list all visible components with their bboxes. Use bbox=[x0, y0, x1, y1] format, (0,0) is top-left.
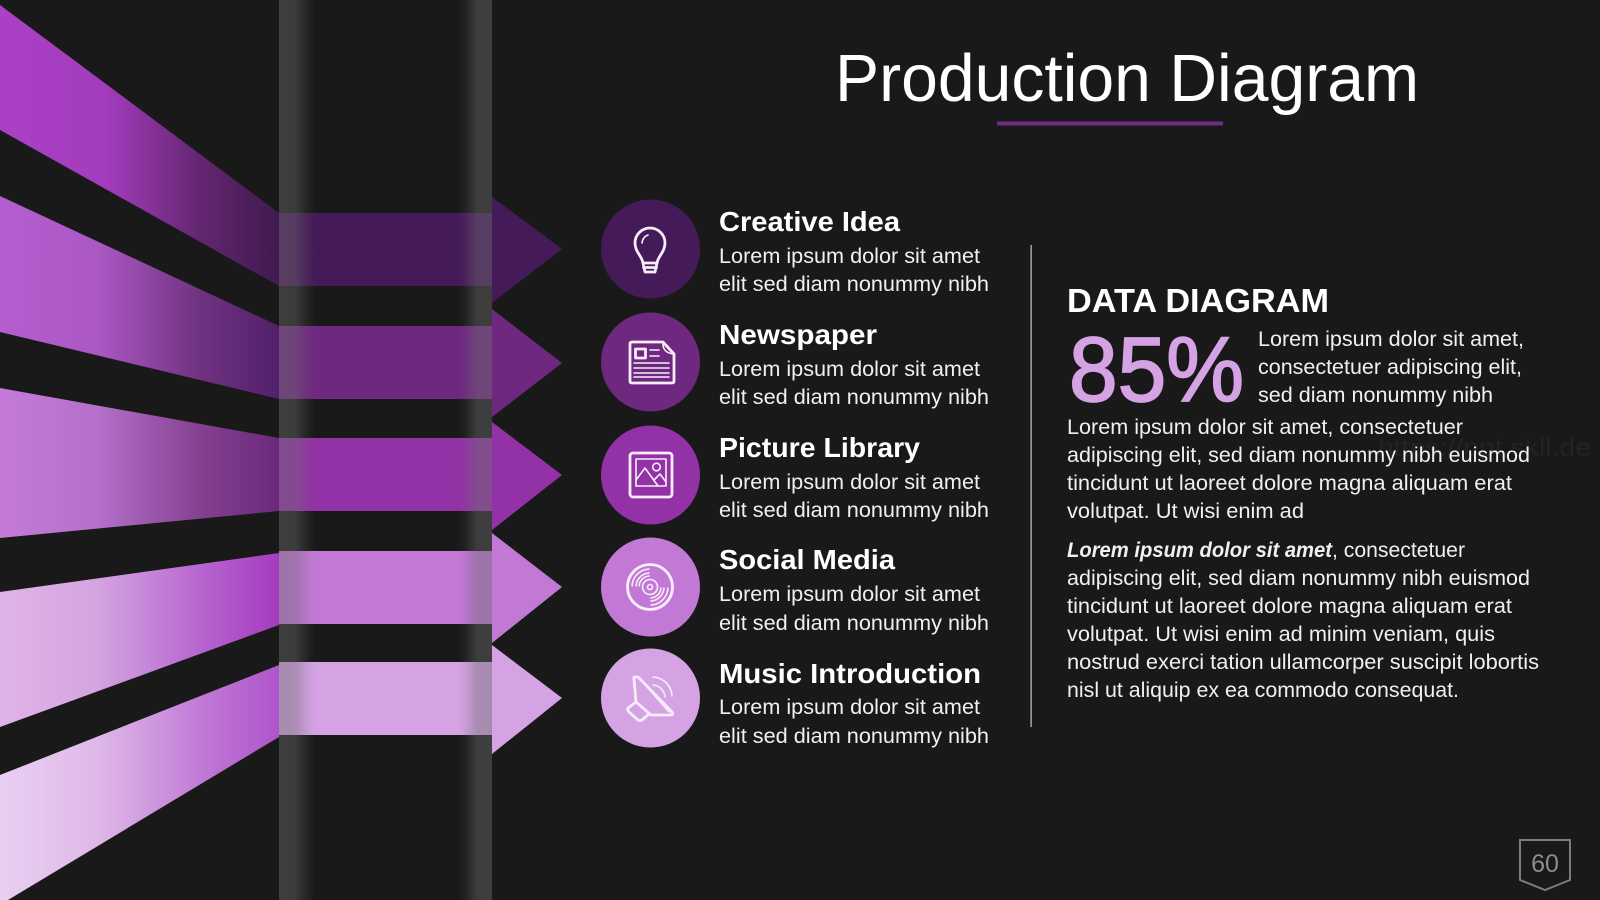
paragraph 1 bbox=[1067, 415, 1530, 523]
funnel band 3 bbox=[0, 388, 279, 538]
paragraph 2 bbox=[1067, 538, 1539, 702]
text: picture library bbox=[719, 432, 989, 522]
paragraph 2: , consectetuer bbox=[1332, 538, 1465, 562]
text beside percentage: consectetuer adipiscing elit, bbox=[1258, 355, 1522, 379]
paragraph 1: adipiscing elit, sed diam nonummy nibh euismod bbox=[1067, 443, 1530, 467]
arrow 4 bbox=[279, 533, 562, 643]
text: music introduction: Music Introduction bbox=[719, 658, 981, 689]
icon: speaker bbox=[628, 677, 673, 720]
data heading: DATA DIAGRAM bbox=[1067, 282, 1329, 319]
circle: music introduction bbox=[601, 648, 700, 748]
title: Production Diagram bbox=[835, 41, 1419, 116]
circle: social media bbox=[601, 538, 700, 636]
arrow 5 bbox=[279, 645, 562, 754]
watermark: https://ppt.skll.de bbox=[1378, 434, 1591, 462]
funnel band 2 bbox=[0, 196, 279, 399]
arrow 3 bbox=[279, 422, 562, 530]
text: social media: Social Media bbox=[719, 544, 895, 575]
circle: picture library bbox=[601, 426, 700, 524]
text: creative idea bbox=[719, 206, 989, 296]
left strip bbox=[279, 0, 315, 900]
icon: music disc bbox=[628, 564, 672, 610]
funnel band 1 bbox=[0, 5, 279, 286]
text beside percentage bbox=[1258, 327, 1524, 407]
arrow 2 bbox=[279, 309, 562, 417]
text: newspaper bbox=[719, 319, 989, 409]
data diagram panel bbox=[1067, 282, 1539, 702]
circle: newspaper bbox=[601, 312, 700, 412]
text: social media: Lorem ipsum dolor sit amet bbox=[719, 582, 980, 606]
funnel band 5 bbox=[0, 665, 279, 900]
paragraph 2: tincidunt ut laoreet dolore magna aliquam erat bbox=[1067, 594, 1512, 618]
paragraph 2: nisl ut aliquip ex ea commodo consequat. bbox=[1067, 678, 1459, 702]
text: social media bbox=[719, 544, 989, 635]
vertical divider bbox=[1030, 245, 1032, 727]
paragraph 2: adipiscing elit, sed diam nonummy nibh euismod bbox=[1067, 566, 1530, 590]
straight bars and arrowheads bbox=[279, 197, 562, 754]
text: newspaper: Newspaper bbox=[719, 319, 877, 350]
text: picture library: Lorem ipsum dolor sit amet bbox=[719, 470, 980, 494]
paragraph 2: nostrud exerci tation ullamcorper suscipit lobortis bbox=[1067, 650, 1539, 674]
text beside percentage: sed diam nonummy nibh bbox=[1258, 383, 1493, 407]
paragraph 1: Lorem ipsum dolor sit amet, consectetuer bbox=[1067, 415, 1463, 439]
right strip bbox=[459, 0, 492, 900]
item list text bbox=[719, 206, 989, 748]
translucent vertical column strips bbox=[279, 0, 492, 900]
funnel band 4 bbox=[0, 553, 279, 727]
text: social media: elit sed diam nonummy nibh bbox=[719, 611, 989, 635]
text: picture library: elit sed diam nonummy nibh bbox=[719, 498, 989, 522]
title underline bbox=[997, 122, 1223, 126]
paragraph 1: volutpat. Ut wisi enim ad bbox=[1067, 499, 1304, 523]
icon: newspaper bbox=[630, 342, 674, 383]
icon: light bulb bbox=[635, 228, 665, 272]
text: creative idea: elit sed diam nonummy nibh bbox=[719, 272, 989, 296]
funnel bands bbox=[0, 5, 279, 900]
text: creative idea: Creative Idea bbox=[719, 206, 900, 237]
text: picture library: Picture Library bbox=[719, 432, 920, 463]
big percentage: 85% bbox=[1069, 319, 1244, 421]
item circles with icons bbox=[601, 200, 700, 748]
text: music introduction bbox=[719, 658, 989, 748]
paragraph 1: tincidunt ut laoreet dolore magna aliquam erat bbox=[1067, 471, 1512, 495]
text: creative idea: Lorem ipsum dolor sit amet bbox=[719, 244, 980, 268]
page number badge: 60 bbox=[1531, 850, 1559, 878]
paragraph 2: Lorem ipsum dolor sit amet bbox=[1067, 538, 1333, 562]
text: music introduction: Lorem ipsum dolor sit amet bbox=[719, 695, 980, 719]
arrow 1 bbox=[279, 197, 562, 303]
page number badge bbox=[1520, 840, 1570, 890]
icon: picture bbox=[630, 453, 672, 497]
paragraph 2: volutpat. Ut wisi enim ad minim veniam, quis bbox=[1067, 622, 1495, 646]
text beside percentage: Lorem ipsum dolor sit amet, bbox=[1258, 327, 1524, 351]
text: music introduction: elit sed diam nonummy nibh bbox=[719, 724, 989, 748]
text: newspaper: Lorem ipsum dolor sit amet bbox=[719, 357, 980, 381]
text: newspaper: elit sed diam nonummy nibh bbox=[719, 385, 989, 409]
circle: creative idea bbox=[601, 200, 700, 298]
